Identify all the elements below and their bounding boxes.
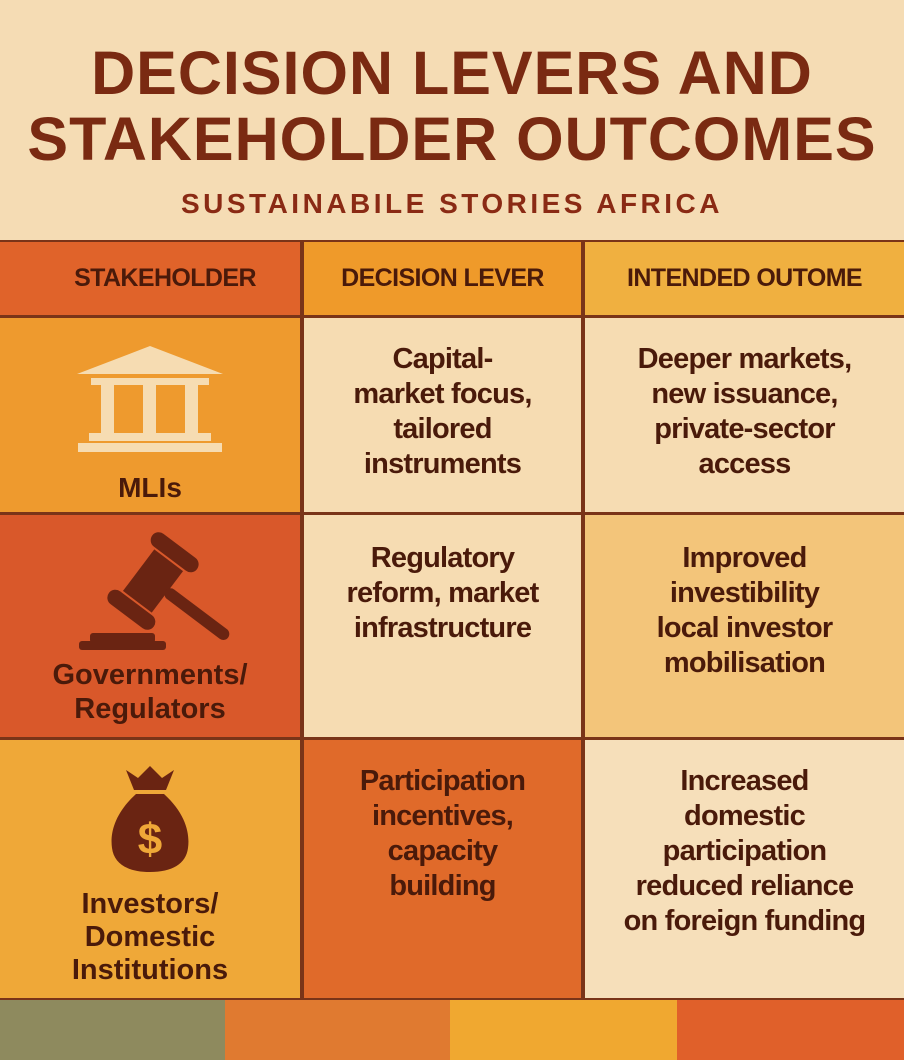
row 3 outcome: reduced reliance: [636, 870, 853, 902]
row 2 stakeholder: governments: Governments/: [52, 659, 248, 691]
row 2 lever: infrastructure: [354, 612, 531, 644]
row 3 lever: Participation: [360, 765, 525, 797]
row 3 stakeholder: investors: Domestic: [85, 921, 215, 953]
title: STAKEHOLDER OUTCOMES: [27, 105, 877, 173]
icon: bank: [77, 346, 223, 452]
row 1 lever: Capital-: [393, 343, 492, 375]
row 2 outcome: mobilisation: [664, 647, 825, 679]
header: decision lever: DECISION LEVER: [341, 264, 544, 292]
row 3 lever: building: [389, 870, 496, 902]
row 2 lever: [304, 515, 581, 737]
row 2 lever: Regulatory: [371, 542, 514, 574]
header: intended outcome: INTENDED OUTOME: [627, 264, 862, 292]
bottom color strip: [0, 1000, 904, 1060]
row 2 outcome: [585, 515, 904, 737]
row 2 stakeholder: governments: Regulators: [74, 693, 226, 725]
row 3 outcome: [585, 740, 904, 998]
row 2 lever: reform, market: [347, 577, 538, 609]
row 1 outcome: new issuance,: [651, 378, 838, 410]
row 3 outcome: domestic: [684, 800, 805, 832]
row 1 stakeholder: MLIs: [0, 318, 300, 512]
row 3 outcome: Increased: [680, 765, 809, 797]
row 1 lever: tailored: [393, 413, 492, 445]
row 3 outcome: on foreign funding: [624, 905, 865, 937]
row 1 stakeholder: MLIs: MLIs: [118, 472, 182, 503]
row 1 lever: [304, 318, 581, 512]
title: DECISION LEVERS AND: [91, 39, 813, 107]
row 3 stakeholder: investors: [0, 740, 300, 998]
row 1 outcome: private-sector: [654, 413, 835, 445]
header: decision lever: [304, 242, 581, 315]
row 1 outcome: Deeper markets,: [638, 343, 851, 375]
row 3 stakeholder: investors: Investors/: [81, 888, 218, 920]
row 1 outcome: access: [698, 448, 790, 480]
row 2 outcome: Improved: [682, 542, 807, 574]
table: [0, 240, 904, 1000]
icon: gavel: [79, 532, 230, 650]
row 3 outcome: participation: [663, 835, 826, 867]
icon: money bag: $: [138, 815, 162, 864]
subtitle: SUSTAINABILE STORIES AFRICA: [181, 188, 723, 219]
row 1 lever: market focus,: [353, 378, 532, 410]
header: intended outcome: [585, 242, 904, 315]
title: [27, 39, 877, 173]
row 2 outcome: local investor: [657, 612, 832, 644]
header: stakeholder: STAKEHOLDER: [74, 264, 256, 292]
header: stakeholder: [0, 242, 300, 315]
row 3 stakeholder: investors: Institutions: [72, 954, 228, 986]
row 3 lever: [304, 740, 581, 998]
row 1 outcome: [585, 318, 904, 512]
row 3 lever: capacity: [388, 835, 497, 867]
icon: money bag: [112, 766, 188, 872]
row 2 outcome: investibility: [670, 577, 819, 609]
row 3 lever: incentives,: [372, 800, 513, 832]
row 1 lever: instruments: [364, 448, 521, 480]
row 2 stakeholder: governments: [0, 515, 300, 737]
